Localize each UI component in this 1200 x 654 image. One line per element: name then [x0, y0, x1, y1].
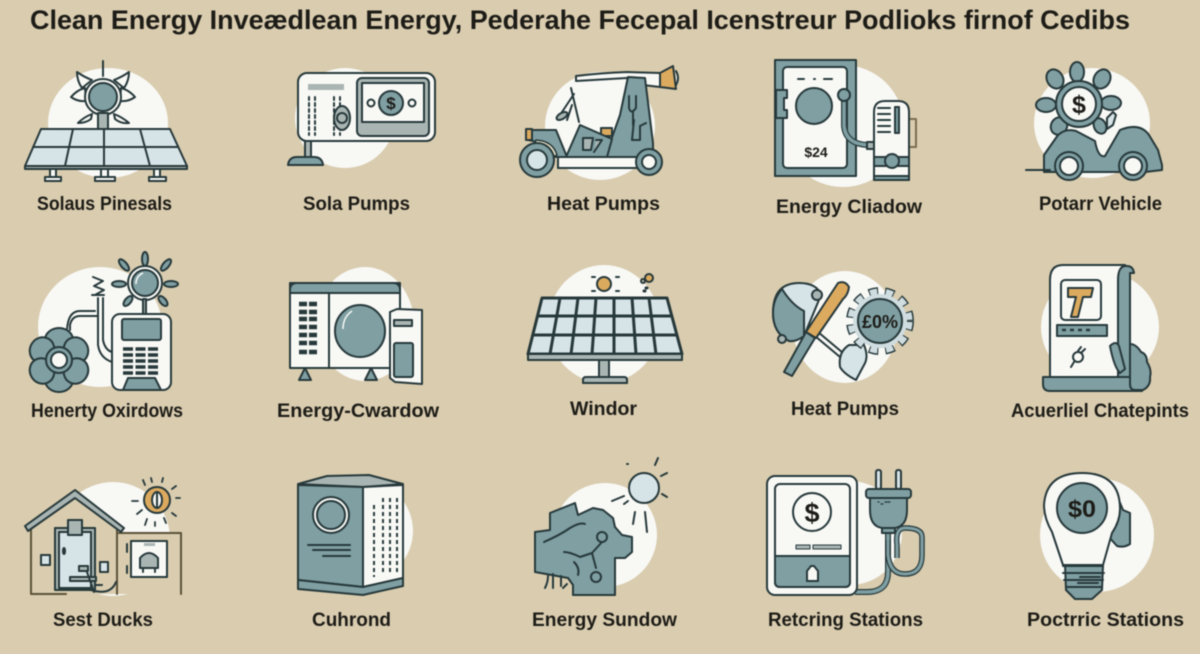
label: Heat Pumps: Heat Pumps [791, 398, 899, 420]
icon: solar vehicle: $ [1072, 91, 1086, 119]
icon: solar panels [25, 61, 187, 181]
icon: heating device with sun and fan [25, 252, 178, 392]
icon: light bulb [1040, 473, 1154, 599]
title: Clean Energy Inveædlean Energy, Pederahe Fecepal Icenstreur Podlioks firnof Cedibs [30, 5, 1130, 35]
icon: charging card and plug [767, 470, 922, 595]
icon: charge point kiosk [1041, 265, 1159, 391]
label: Potarr Vehicle: Potarr Vehicle [1039, 193, 1162, 215]
icon: outdoor air unit [290, 267, 422, 384]
label: Energy-Cwardow: Energy-Cwardow [277, 400, 440, 422]
label: Henerty Oxirdows: Henerty Oxirdows [31, 400, 183, 422]
icon: tools and gear: £0% [862, 312, 898, 332]
icon: solar vehicle [1026, 62, 1162, 180]
label: Energy Sundow: Energy Sundow [532, 609, 678, 631]
label: Cuhrond: Cuhrond [312, 609, 391, 631]
label: Poctrric Stations: Poctrric Stations [1027, 609, 1184, 631]
label: Energy Cliadow: Energy Cliadow [776, 196, 923, 218]
label: Solaus Pinesals: Solaus Pinesals [37, 193, 172, 215]
icon: light bulb: $0 [1068, 496, 1096, 523]
label: Sest Ducks: Sest Ducks [53, 609, 153, 631]
label: Windor: Windor [570, 398, 637, 420]
icon: payment terminal [288, 68, 435, 168]
icon: storage cabinet [298, 475, 413, 595]
label: Heat Pumps: Heat Pumps [547, 193, 660, 215]
icon: energy charger: $24 [804, 144, 828, 160]
icon: payment terminal: $ [386, 94, 396, 113]
icon: solar panel array [528, 265, 682, 383]
label: Acuerliel Chatepints: Acuerliel Chatepints [1011, 400, 1189, 422]
label: Retcring Stations: Retcring Stations [768, 609, 923, 631]
icon: house with appliance [25, 478, 182, 596]
label: Sola Pumps: Sola Pumps [303, 193, 410, 215]
icon: tools and gear [773, 271, 909, 383]
icon: charging card and plug: $ [804, 498, 820, 528]
icon: energy charger [775, 60, 916, 187]
icon: energy map with sun [535, 458, 667, 595]
icon: heat pump vehicle [520, 66, 678, 180]
